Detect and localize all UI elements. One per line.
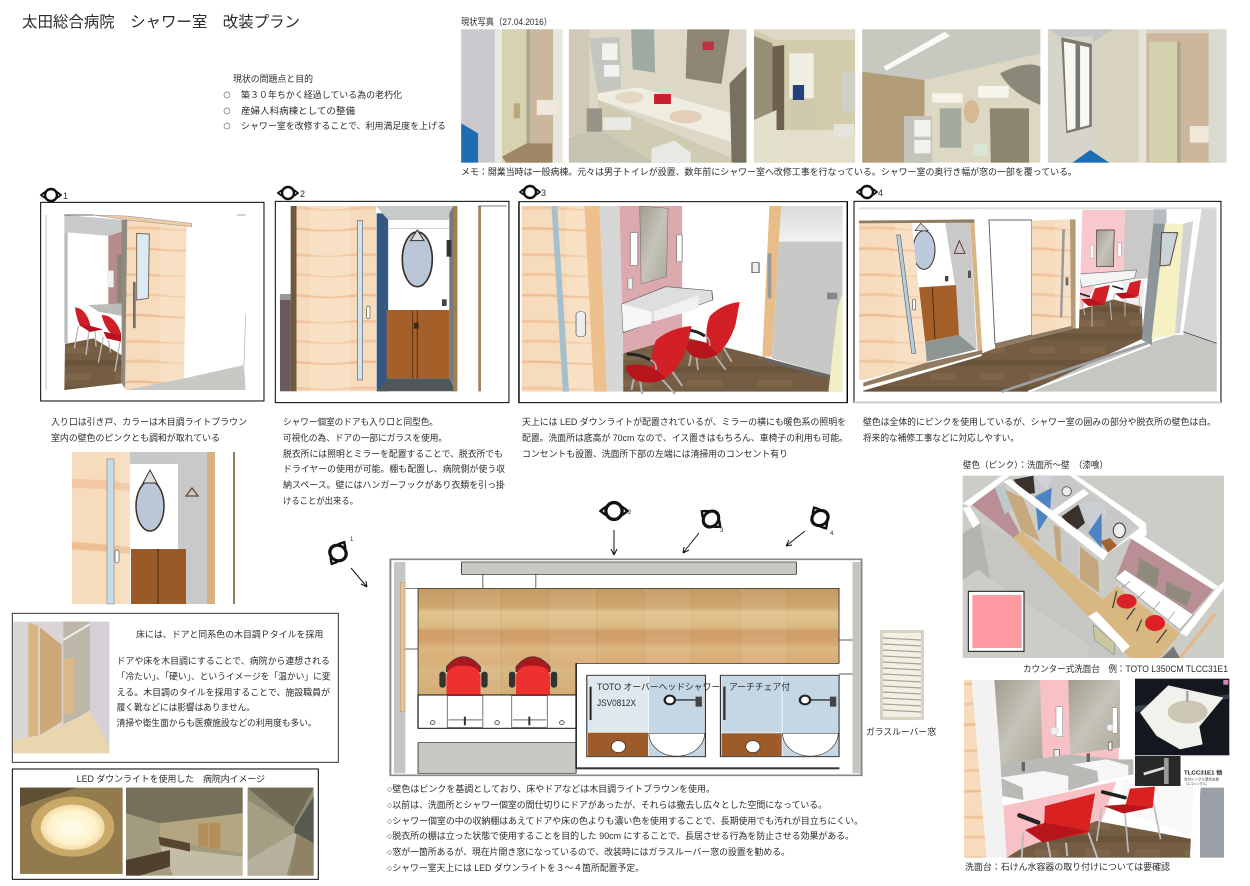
wash counter [418, 695, 576, 728]
viewpoint label 3: 3 [541, 188, 546, 198]
marker 2 with arrow: 2 [628, 510, 632, 516]
text block: current problems and goals: 産婦人科病棟としての整備 [241, 105, 355, 116]
plan product note: JSV0812X [597, 698, 636, 708]
panel: wood floor tile note: 「冷たい」、「硬い」、というイメージを「温かい」に変 [117, 670, 331, 681]
marker 4 with arrow: 4 [830, 531, 834, 537]
viewpoint label 2 [278, 187, 305, 199]
small interior view: changing area [72, 452, 235, 604]
panel: LED downlight images: LED ダウンライトを使用した 病院内イメージ [77, 773, 265, 784]
panel: wood floor tile note: ドアや床を木目調にすることで、病院から連想される [117, 655, 330, 666]
text block: current problems and goals: 築３０年ちかく経過している為の老朽化 [241, 89, 402, 100]
panel: wood floor tile note: える。木目調のタイルを採用することで、施設職員が [117, 686, 330, 697]
product label: （エコシングル） [1184, 781, 1209, 786]
photo: LED lamp [20, 788, 123, 874]
caption panel 4: 壁色は全体的にピンクを使用しているが、シャワー室の囲みの部分や脱衣所の壁色は白。 [863, 416, 1216, 427]
wood floor [418, 588, 839, 695]
marker 1 with arrow: 1 [350, 537, 354, 543]
caption panel 4 [863, 416, 1216, 443]
product label: 台付シングル混合水栓 [1184, 776, 1220, 781]
caption panel 2 [283, 416, 505, 506]
caption panel 2: 脱衣所には照明とミラーを配置することで、脱衣所でも [283, 448, 503, 459]
notes under the plan [387, 783, 863, 873]
marker 1 with arrow [324, 537, 367, 587]
plan product note: TOTO オーバーヘッドシャワー アーチチェア付 [597, 682, 790, 692]
text block: current problems and goals: 現状の問題点と目的 [233, 73, 313, 84]
notes under the plan: ○シャワー個室の中の収納棚はあえてドアや床の色よりも濃い色を使用することで、長期使用でも汚れが目立ちにくい。 [387, 815, 863, 826]
marker 3 with arrow [683, 505, 726, 553]
caption panel 2: ドライヤーの使用が可能。棚も配置し、病院側が使う収 [283, 463, 505, 474]
viewpoint label 1 [41, 189, 68, 201]
caption panel 3 [522, 416, 848, 459]
viewpoint label 3 [520, 186, 546, 198]
memo line: メモ：開業当時は一般病棟。元々は男子トイレが設置、数年前にシャワー室へ改修工事を行なっている。シャワー室の奥行き幅が窓の一部を覆っている。 [461, 166, 1077, 177]
photo: hospital corridor [248, 788, 314, 876]
text block: current problems and goals [224, 73, 446, 131]
photo caption: 現状写真（27.04.2016） [461, 16, 552, 27]
far chair [1112, 280, 1141, 317]
notes under the plan: ○シャワー室天上には LED ダウンライトを３〜４箇所配置予定。 [387, 862, 644, 873]
viewpoint label 1: 1 [63, 191, 68, 201]
product photo: basin [1135, 679, 1229, 755]
notes under the plan: ○脱衣所の棚は立った状態で使用することを目的した 90cm にすることで、長居させる行為を防止させる効果がある。 [387, 830, 854, 841]
photo 3: corridor [754, 29, 855, 163]
panel: wood floor tile note: 床には、ドアと同系色の木目調Ｐタイルを採用 [136, 629, 323, 640]
caption panel 2: 可視化の為、ドアの一部にガラスを使用。 [283, 432, 447, 443]
chair top view 1 [439, 657, 488, 695]
panel 2: shower room door [275, 201, 509, 403]
photo: hospital hall [126, 788, 243, 876]
viewpoint label 4 [857, 186, 883, 198]
chair back [1097, 787, 1161, 853]
panel: wood floor tile note: 履く靴などには影響はありません。 [117, 702, 255, 713]
panel: LED downlight images [12, 769, 318, 879]
panel: wood floor tile note [12, 613, 338, 762]
floor plan [390, 559, 862, 775]
isometric view of the whole room [963, 476, 1224, 658]
icon: glass louver window [880, 630, 924, 720]
photo 4: ceiling and lamp [862, 29, 1040, 163]
caption panel 1 [51, 416, 247, 443]
caption panel 3: 配置。洗面所は底高が 70cm なので、イス置きはもちろん、車椅子の利用も可能。 [522, 432, 848, 443]
chair top view 2 [509, 657, 557, 695]
photo 1: shower door [461, 29, 562, 163]
shower unit 2 [720, 675, 839, 757]
caption panel 2: 納スペース。壁にはハンガーフックがあり衣類を引っ掛 [283, 479, 505, 490]
caption panel 2: シャワー個室のドアも入り口と同型色。 [283, 416, 438, 427]
panel 3: wash counter [519, 202, 847, 403]
viewpoint label 4: 4 [878, 188, 883, 198]
marker 4 with arrow [786, 503, 834, 546]
caption: soap dispenser note: 洗面台：石けん水容器の取り付けについては要確認 [965, 861, 1170, 872]
text block: current problems and goals: シャワー室を改修することで、利用満足度を上げる [241, 120, 446, 131]
photo: wood doors [13, 622, 109, 753]
floor plan viewpoint markers [324, 503, 834, 587]
caption: wall colour: 壁色（ピンク）：洗面所～壁 （漆喰） [963, 459, 1108, 470]
notes under the plan: ○以前は、洗面所とシャワー個室の間仕切りにドアがあったが、それらは撤去し広々とした空間になっている。 [387, 799, 827, 810]
chair right [98, 315, 121, 372]
caption panel 1: 入り口は引き戸、カラーは木目調ライトブラウン [51, 416, 247, 427]
plan product note [597, 682, 790, 708]
product photo: faucet [1135, 756, 1181, 786]
shower unit 1 [587, 675, 705, 757]
viewpoint label 2: 2 [300, 189, 305, 199]
caption panel 3: 天上には LED ダウンライトが配置されているが、ミラーの横にも暖色系の照明を [522, 416, 846, 427]
notes under the plan: ○壁色はピンクを基調としており、床やドアなどは木目調ライトブラウンを使用。 [387, 783, 715, 794]
photo 2: washbasins [569, 29, 746, 163]
interior view of basins with product photo [964, 679, 1229, 858]
panel 4: corridor overview [854, 201, 1221, 402]
louver label: ガラスルーバー窓 [866, 727, 936, 737]
notes under the plan: ○窓が一箇所あるが、現在片開き窓になっているので、改装時にはガラスルーバー窓の設置を勧める。 [387, 846, 790, 857]
caption panel 4: 将来的な補修工事などに対応しやすい。 [863, 432, 1019, 443]
marker 2 with arrow [600, 503, 632, 555]
marker 3 with arrow: 3 [720, 528, 724, 534]
chair left [74, 307, 103, 355]
current photos strip [461, 29, 1227, 163]
product label [1181, 756, 1229, 786]
near chair [1079, 285, 1112, 327]
title: 太田総合病院 シャワー室 改装プラン [22, 13, 300, 31]
panel 1: entrance sliding door [41, 202, 264, 401]
colour swatch [968, 591, 1024, 651]
caption panel 1: 室内の壁色のピンクとも調和が取れている [51, 432, 220, 443]
panel: wood floor tile note: 清掃や衛生面からも医療施設などの利用度も多い。 [117, 717, 317, 728]
caption: counter type basin: カウンター式洗面台 例：TOTO L350CM TLCC31E1 [1023, 663, 1228, 674]
caption panel 2: けることが出来る。 [283, 495, 358, 506]
photo 5: window and shower [1048, 29, 1227, 163]
product label: TLCC31E1 他 [1184, 768, 1223, 776]
caption panel 3: コンセントも設置、洗面所下部の左端には清掃用のコンセント有り [522, 448, 788, 459]
chair front [1019, 793, 1097, 858]
